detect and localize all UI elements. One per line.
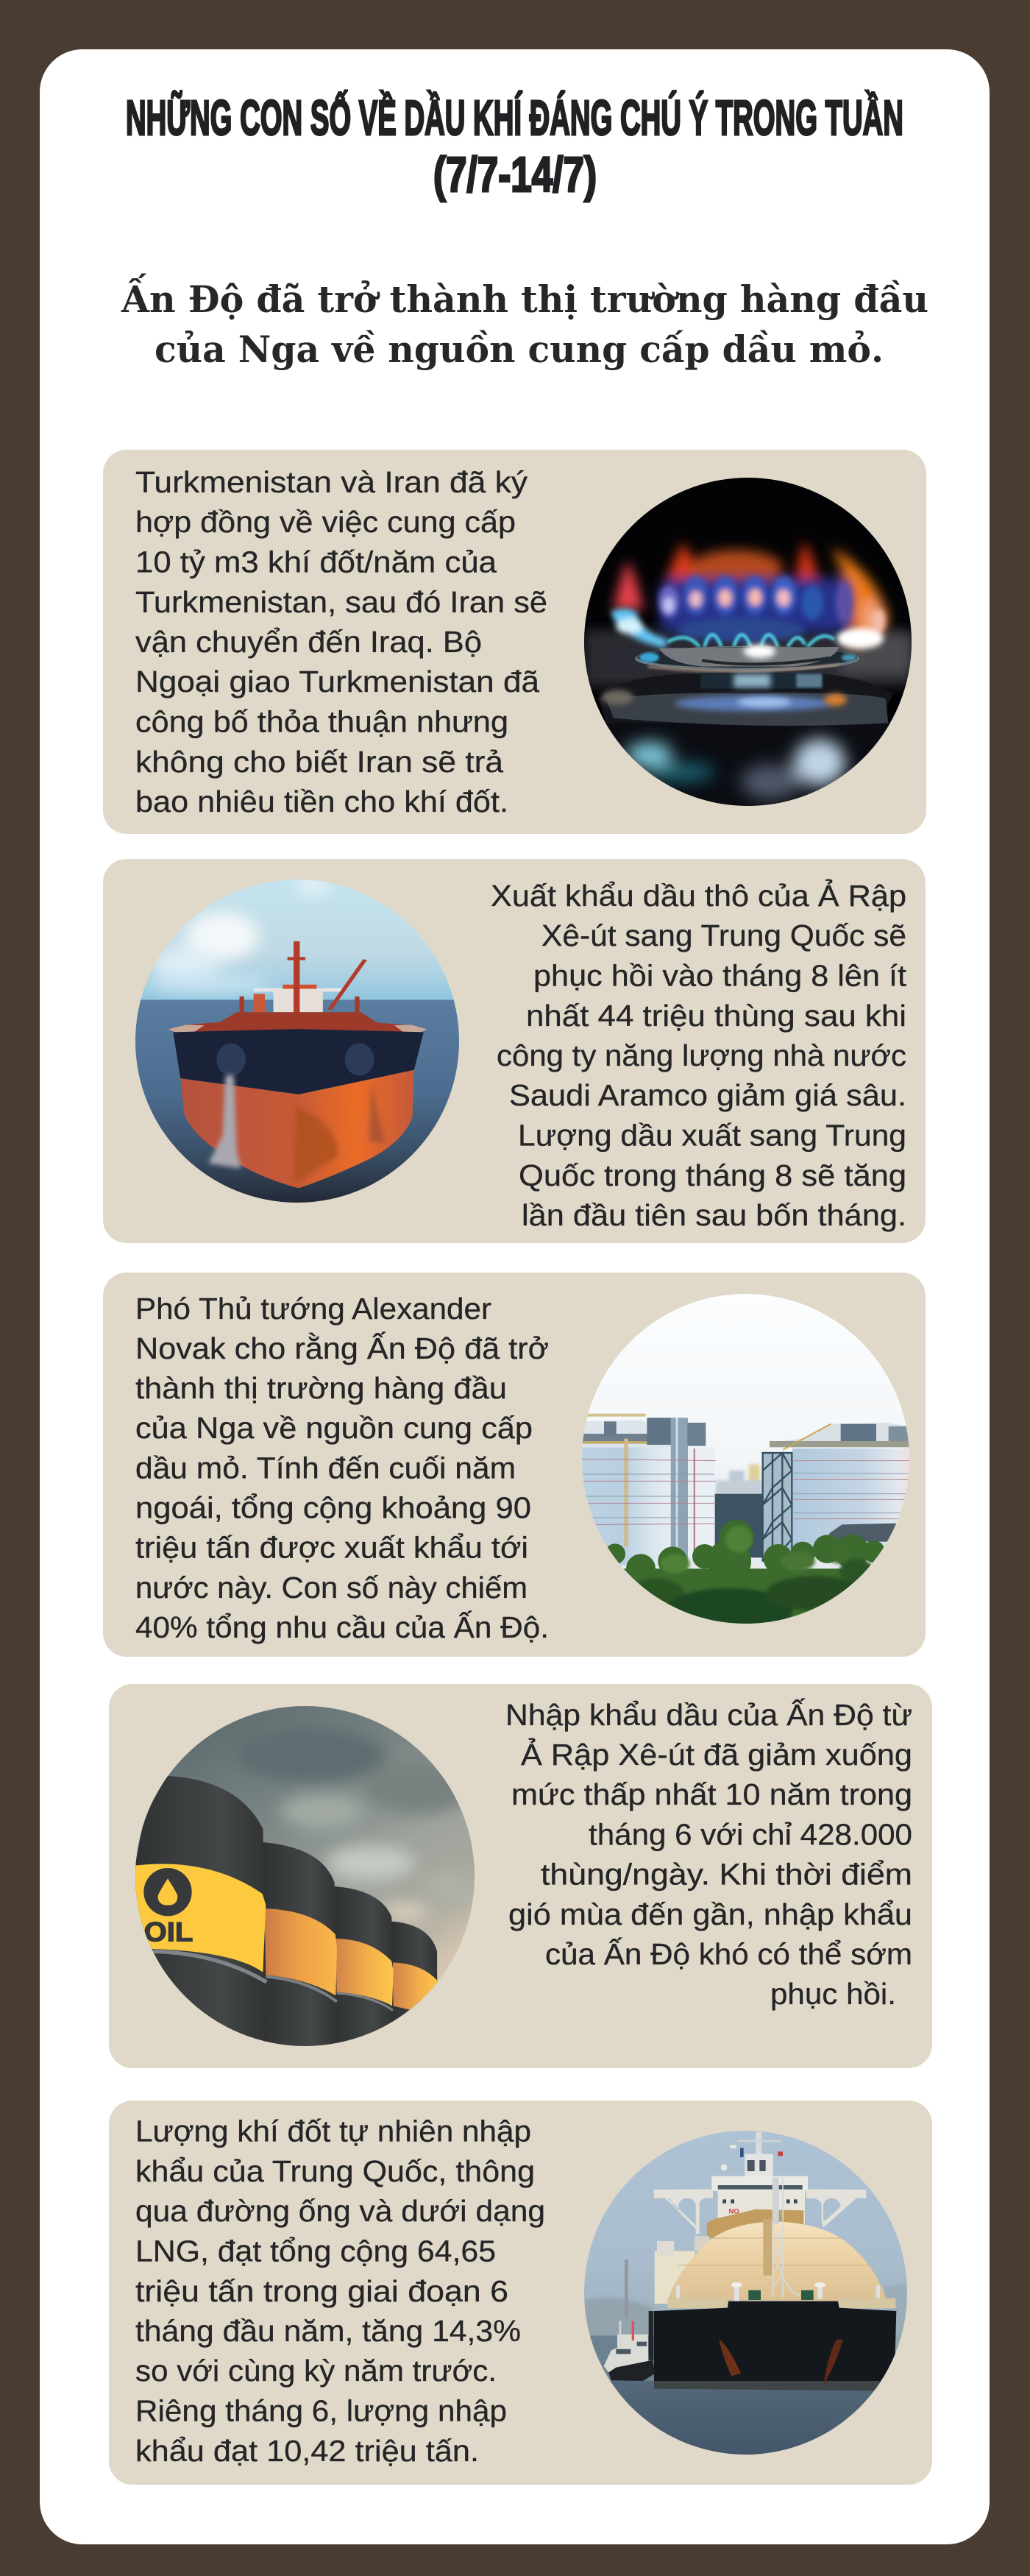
text block: India imports: thùng/ngày. Khi thời điểm xyxy=(541,1858,912,1892)
icon: oil drop logo xyxy=(143,1868,192,1916)
title: (7/7-14/7) xyxy=(433,146,597,202)
text block: China gas: Riêng tháng 6, lượng nhập xyxy=(135,2393,507,2427)
text block: Saudi crude xyxy=(491,879,907,1232)
panel: Saudi crude exports xyxy=(103,859,926,1243)
photo: gas burner flame xyxy=(584,478,912,806)
text block: China gas: triệu tấn trong giai đoạn 6 xyxy=(135,2274,508,2308)
text block: India imports xyxy=(505,1698,912,2011)
text block: India imports: phục hồi. xyxy=(770,1977,896,2011)
text block: Saudi crude: phục hồi vào tháng 8 lên ít xyxy=(533,958,907,992)
trees xyxy=(605,1520,885,1625)
panel: Turkmenistan gas xyxy=(103,450,926,834)
text block: China gas: Lượng khí đốt tự nhiên nhập xyxy=(135,2114,531,2148)
photo: oil barrels: OIL xyxy=(144,1916,193,1947)
text block: Turkmenistan and Iran: hợp đồng về việc cung cấp xyxy=(135,505,516,539)
text block: India imports: tháng 6 với chỉ 428.000 xyxy=(589,1818,912,1852)
mast and superstructure xyxy=(653,2132,866,2251)
text block: China gas: LNG, đạt tổng cộng 64,65 xyxy=(135,2234,496,2268)
text block: Turkmenistan and Iran: Turkmenistan và Iran đã ký xyxy=(135,465,528,499)
photo: oil tanker bow xyxy=(135,880,459,1203)
title: NHỮNG CON SỐ VỀ DẦU KHÍ ĐÁNG CHÚ Ý TRONG TUẦN xyxy=(126,90,903,146)
text block: Saudi crude: Quốc trong tháng 8 sẽ tăng xyxy=(519,1158,906,1192)
text block: Turkmenistan and Iran xyxy=(135,465,547,818)
text block: Saudi crude: Lượng dầu xuất sang Trung xyxy=(518,1119,906,1153)
hull xyxy=(654,2301,896,2389)
text block: India imports: của Ấn Độ khó có thể sớm xyxy=(545,1937,912,1971)
text block: China gas: khẩu đạt 10,42 triệu tấn. xyxy=(135,2434,479,2468)
text block: India imports: gió mùa đến gần, nhập khẩu xyxy=(508,1897,912,1931)
text block: China gas: qua đường ống và dưới dạng xyxy=(135,2194,545,2228)
text block: Saudi crude: nhất 44 triệu thùng sau khi xyxy=(526,999,906,1033)
subtitle: của Nga về nguồn cung cấp dầu mỏ. xyxy=(154,328,884,372)
text block: Turkmenistan and Iran: Ngoại giao Turkmenistan đã xyxy=(135,665,539,698)
mast and superstructure: NO xyxy=(729,2208,739,2215)
text block: Saudi crude: Xuất khẩu dầu thô của Ả Rập xyxy=(491,879,906,913)
text block: Novak on India: 40% tổng nhu cầu của Ấn Độ. xyxy=(135,1610,549,1644)
text block: Turkmenistan and Iran: công bố thỏa thuận nhưng xyxy=(135,705,508,739)
panel: Russia and India xyxy=(103,1273,926,1657)
text block: Novak on India: của Nga về nguồn cung cấp xyxy=(135,1411,533,1445)
text block: Saudi crude: Saudi Aramco giảm giá sâu. xyxy=(509,1078,906,1112)
distant cranes xyxy=(716,1465,762,1495)
text block: China gas xyxy=(135,2114,545,2468)
left side tanks xyxy=(655,2251,695,2304)
text block: India imports: mức thấp nhất 10 năm trong xyxy=(511,1777,912,1811)
text block: Novak on India xyxy=(135,1292,549,1644)
text block: Turkmenistan and Iran: không cho biết Iran sẽ trả xyxy=(135,745,503,779)
text block: Novak on India: nước này. Con số này chiếm xyxy=(135,1571,528,1604)
title xyxy=(126,89,903,203)
photo: LNG carrier xyxy=(584,2131,907,2455)
LNG dome xyxy=(667,2221,887,2301)
text block: India imports: Nhập khẩu dầu của Ấn Độ từ xyxy=(505,1698,912,1732)
panel: India imports from Saudi Arabia xyxy=(109,1684,932,2068)
text block: Novak on India: Phó Thủ tướng Alexander xyxy=(135,1292,491,1326)
text block: Novak on India: ngoái, tổng cộng khoảng 90 xyxy=(135,1491,531,1525)
subtitle xyxy=(121,273,928,372)
text block: Turkmenistan and Iran: 10 tỷ m3 khí đốt/năm của xyxy=(135,545,497,578)
text block: Saudi crude: Xê-út sang Trung Quốc sẽ xyxy=(541,919,906,952)
subtitle: Ấn Độ đã trở thành thị trường hàng đầu xyxy=(121,273,928,322)
text block: China gas: so với cùng kỳ năm trước. xyxy=(135,2354,497,2388)
tug boat xyxy=(604,2321,655,2381)
text block: Novak on India: thành thị trường hàng đầu xyxy=(135,1371,507,1405)
text block: Novak on India: dầu mỏ. Tính đến cuối năm xyxy=(135,1451,516,1485)
text block: Turkmenistan and Iran: vận chuyển đến Iraq. Bộ xyxy=(135,625,482,659)
panel: China natural gas imports xyxy=(109,2101,932,2485)
text block: Novak on India: Novak cho rằng Ấn Độ đã trở xyxy=(135,1331,549,1365)
text block: Novak on India: triệu tấn được xuất khẩu tới xyxy=(135,1531,528,1565)
text block: Turkmenistan and Iran: Turkmenistan, sau đó Iran sẽ xyxy=(135,585,547,619)
text block: India imports: Ả Rập Xê-út đã giảm xuống xyxy=(521,1738,912,1772)
text block: China gas: khẩu của Trung Quốc, thông xyxy=(135,2154,535,2188)
photo: LNG storage tanks xyxy=(582,1294,909,1624)
photo: oil barrels xyxy=(135,1706,475,2046)
text block: Saudi crude: công ty năng lượng nhà nước xyxy=(497,1038,906,1072)
text block: Saudi crude: lần đầu tiên sau bốn tháng. xyxy=(522,1198,906,1232)
text block: China gas: tháng đầu năm, tăng 14,3% xyxy=(135,2314,521,2348)
text block: Turkmenistan and Iran: bao nhiêu tiền cho khí đốt. xyxy=(135,785,508,818)
